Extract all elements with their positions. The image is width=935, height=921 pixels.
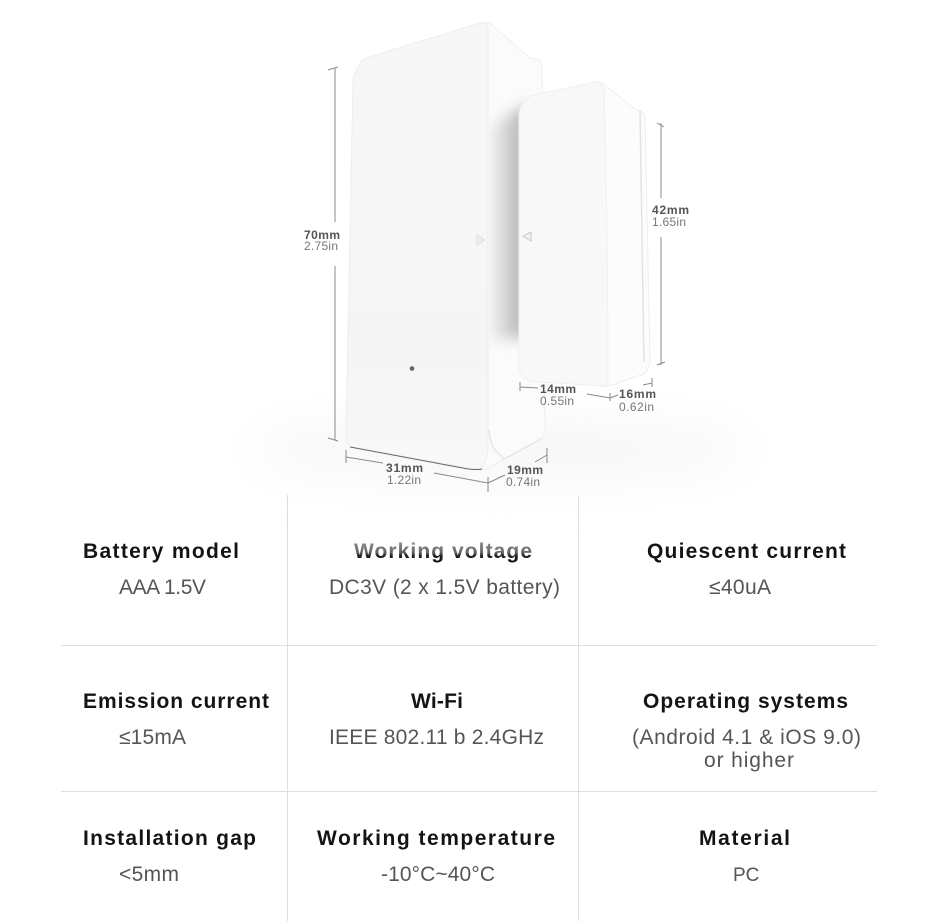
dimension: width 14mm	[520, 382, 576, 408]
alignment arrow left	[477, 235, 484, 245]
magnet front face	[519, 82, 608, 386]
spec: working temperature: -10°C~40°C	[381, 863, 495, 886]
body side face	[470, 23, 545, 470]
dimension: depth 16mm: 0.62in	[619, 400, 654, 414]
body front face	[346, 23, 488, 470]
spec: wi-fi: Wi-Fi	[411, 690, 463, 713]
spec: working voltage: Working voltage	[354, 540, 532, 563]
dimension: height 42mm: 1.65in	[652, 215, 686, 229]
body lower side lip	[489, 430, 541, 459]
dimension: height 42mm: 42mm	[652, 203, 689, 217]
dimension: height 42mm	[652, 123, 689, 365]
spec: quiescent current: Quiescent current	[647, 540, 846, 563]
spec: battery model: Battery model	[83, 540, 239, 563]
spec: operating systems: or higher	[704, 749, 794, 772]
ground shadow	[250, 420, 750, 480]
dimension: height 70mm	[304, 67, 340, 441]
magnet side face	[570, 82, 650, 386]
spec: working temperature	[317, 827, 555, 886]
spec: operating systems: (Android 4.1 & iOS 9.0)	[632, 726, 861, 749]
spec: wi-fi: IEEE 802.11 b 2.4GHz	[329, 726, 544, 749]
dimension: width 14mm: 0.55in	[540, 394, 574, 408]
spec: battery model: AAA 1.5V	[119, 576, 206, 599]
spec: material: PC	[733, 865, 759, 886]
body side shadow	[489, 104, 527, 340]
spec: battery model	[83, 540, 239, 599]
spec: quiescent current	[647, 540, 846, 599]
dimension: depth 16mm: 16mm	[619, 387, 656, 401]
dimension: width 14mm: 14mm	[540, 382, 576, 396]
spec: quiescent current: ≤40uA	[709, 576, 771, 599]
dimension: height 70mm: 70mm	[304, 228, 340, 242]
dimension: width 31mm	[346, 450, 488, 492]
product: main sensor body	[346, 23, 545, 470]
dimension: depth 19mm: 19mm	[507, 463, 543, 477]
spec: wi-fi	[329, 690, 544, 749]
spec: emission current: Emission current	[83, 690, 269, 713]
body bottom dark edge	[350, 447, 482, 470]
spec: emission current	[83, 690, 269, 749]
spec: material	[699, 827, 790, 886]
product: magnet sensor	[519, 82, 650, 386]
spec: installation gap: <5mm	[119, 863, 179, 886]
alignment arrow right	[523, 232, 531, 241]
dimension: depth 19mm: 0.74in	[506, 475, 540, 489]
dimension: height 70mm: 2.75in	[304, 239, 338, 253]
spec: installation gap	[83, 827, 256, 886]
spec: operating systems	[632, 690, 861, 772]
spec: installation gap: Installation gap	[83, 827, 256, 850]
spec: working temperature: Working temperature	[317, 827, 555, 850]
spec: working voltage: DC3V (2 x 1.5V battery)	[329, 576, 560, 599]
spec: material: Material	[699, 827, 790, 850]
spec: emission current: ≤15mA	[119, 726, 186, 749]
dimension: width 31mm: 31mm	[386, 461, 423, 475]
spec: working voltage	[329, 540, 560, 599]
spec: operating systems: Operating systems	[643, 690, 848, 713]
specification table grid	[61, 495, 877, 921]
dimension: width 31mm: 1.22in	[387, 473, 421, 487]
status LED hole	[410, 366, 414, 371]
dimension: depth 19mm	[488, 448, 547, 489]
dimension: depth 16mm	[587, 378, 656, 414]
magnet side detail	[640, 110, 644, 362]
